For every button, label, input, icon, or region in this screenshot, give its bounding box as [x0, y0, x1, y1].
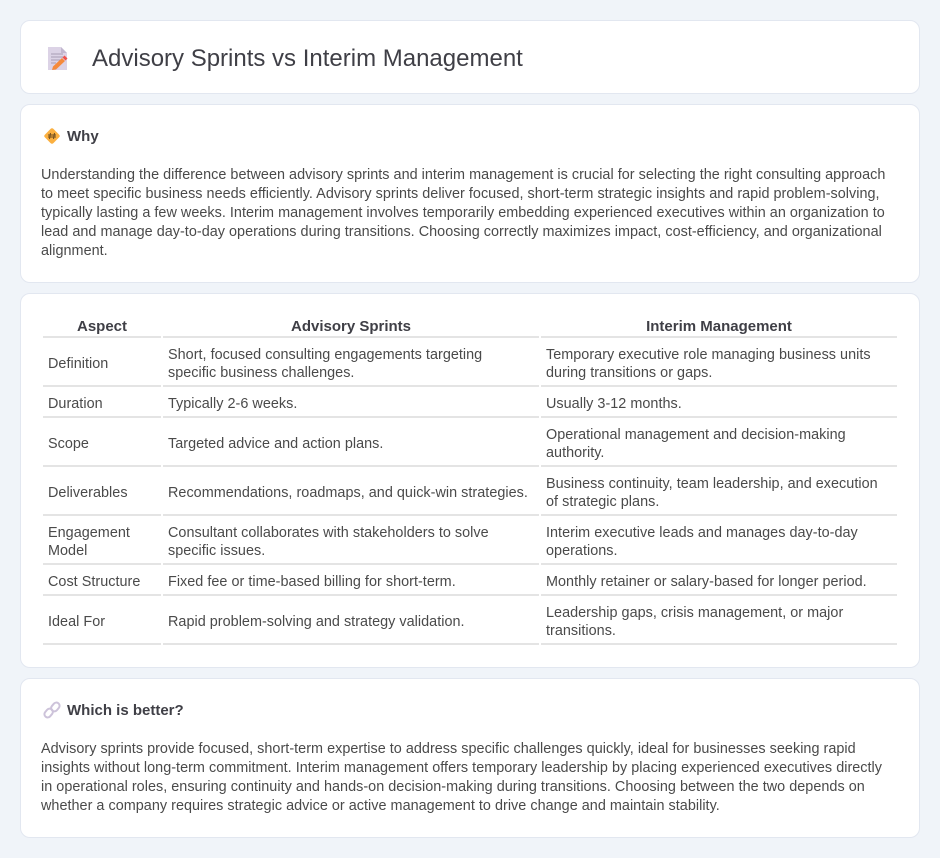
- panel: which is better: in operational roles, ensuring continuity and hands-on decision-making during transitions. Choosing between the two depends on: [41, 779, 865, 795]
- table header: [77, 318, 792, 335]
- table rules: [43, 336, 897, 645]
- panel: comparison table: Short, focused consulting engagements targeting: [168, 347, 482, 363]
- panel: header: [20, 20, 920, 94]
- row: definition: [48, 347, 871, 381]
- panel: comparison table: [20, 293, 920, 668]
- panel: comparison table: transitions.: [546, 623, 616, 639]
- panel: comparison table: Interim executive leads and manages day-to-day: [546, 525, 858, 541]
- panel: comparison table: Temporary executive role managing business units: [546, 347, 871, 363]
- panel: comparison table: Usually 3-12 months.: [546, 396, 682, 412]
- panel: why: Understanding the difference between advisory sprints and interim management is crucial for selecting the right consulting approach: [41, 167, 885, 183]
- row: engagement model: [48, 525, 858, 559]
- panel: comparison table: Duration: [48, 396, 103, 412]
- panel: why: [20, 104, 920, 283]
- panel: comparison table: Operational management and decision-making: [546, 427, 846, 443]
- panel: comparison table: Typically 2-6 weeks.: [168, 396, 297, 412]
- icon: link: [44, 702, 60, 718]
- panel: comparison table: Recommendations, roadmaps, and quick-win strategies.: [168, 485, 528, 501]
- panel: comparison table: Leadership gaps, crisis management, or major: [546, 605, 843, 621]
- table header: Interim Management: [646, 318, 792, 335]
- panel: which is better: insights without long-term commitment. Interim management offers temporary leadership by placing experienced executives directly: [41, 760, 882, 776]
- panel: comparison table: during transitions or gaps.: [546, 365, 712, 381]
- row: cost structure: [48, 574, 867, 590]
- panel: comparison table: Fixed fee or time-based billing for short-term.: [168, 574, 456, 590]
- panel: why: alignment.: [41, 243, 108, 259]
- row: duration: [48, 396, 682, 412]
- table header: Aspect: [77, 318, 127, 335]
- panel: why: typically lasting a few weeks. Interim management involves temporarily embedding experienced executives within an organization to: [41, 205, 885, 221]
- panel: why: to meet specific business needs efficiently. Advisory sprints deliver focused, short-term strategic insights and rapid problem-solving,: [41, 186, 880, 202]
- table header: Advisory Sprints: [291, 318, 411, 335]
- panel: comparison table: Deliverables: [48, 485, 128, 501]
- row: deliverables: [48, 476, 878, 510]
- panel: comparison table: specific business challenges.: [168, 365, 354, 381]
- title: Advisory Sprints vs Interim Management: [92, 45, 523, 72]
- panel: comparison table: Business continuity, team leadership, and execution: [546, 476, 878, 492]
- heading: why: Why: [67, 128, 99, 145]
- icon: document with pencil: [48, 47, 68, 70]
- panel: comparison table: Ideal For: [48, 614, 105, 630]
- panel: comparison table: of strategic plans.: [546, 494, 659, 510]
- row: ideal for: [48, 605, 844, 639]
- panel: why: lead and manage day-to-day operations during transitions. Choosing correctly maximizes impact, cost-efficiency, and organizational: [41, 224, 882, 240]
- panel: comparison table: operations.: [546, 543, 618, 559]
- panel: comparison table: specific issues.: [168, 543, 265, 559]
- panel: comparison table: Definition: [48, 356, 108, 372]
- heading: which is better: Which is better?: [67, 702, 184, 719]
- panel: comparison table: Engagement: [48, 525, 130, 541]
- panel: comparison table: Targeted advice and action plans.: [168, 436, 383, 452]
- row: scope: [48, 427, 846, 461]
- panel: which is better: [20, 678, 920, 838]
- icon: road sign: [44, 128, 60, 144]
- text block: why: [41, 167, 885, 259]
- panel: comparison table: Model: [48, 543, 87, 559]
- panel: which is better: whether a company requires strategic advice or active management to drive change and maintain stability.: [41, 798, 720, 814]
- panel: which is better: Advisory sprints provide focused, short-term expertise to address specific challenges quickly, ideal for businesses seeking rapid: [41, 741, 856, 757]
- panel: comparison table: Scope: [48, 436, 89, 452]
- panel: comparison table: authority.: [546, 445, 604, 461]
- panel: comparison table: Monthly retainer or salary-based for longer period.: [546, 574, 867, 590]
- text block: which is better: [41, 741, 882, 814]
- panel: comparison table: Cost Structure: [48, 574, 140, 590]
- panel: comparison table: Consultant collaborates with stakeholders to solve: [168, 525, 489, 541]
- panel: comparison table: Rapid problem-solving and strategy validation.: [168, 614, 465, 630]
